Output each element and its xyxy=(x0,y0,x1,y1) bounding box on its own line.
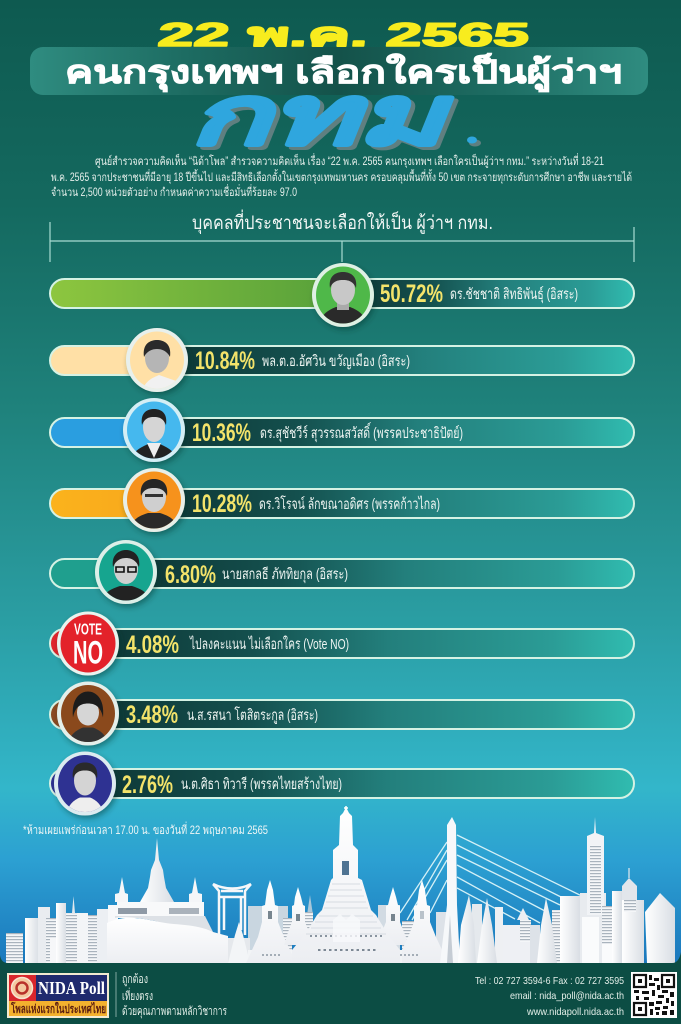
contact xyxy=(475,975,624,1018)
value: 10.84% xyxy=(195,347,255,375)
golden mount xyxy=(107,838,228,963)
row 1 xyxy=(50,263,634,327)
value: 10.36% xyxy=(192,419,251,447)
row 2 xyxy=(50,328,634,392)
row 7 xyxy=(50,682,634,746)
left towers xyxy=(6,896,118,963)
banner: headline xyxy=(30,47,648,95)
qr code xyxy=(631,972,677,1018)
title: date: 22 พ.ค. 2565 xyxy=(156,17,531,54)
portrait: Aswin xyxy=(126,328,188,392)
chart heading: บุคคลที่ประชาชนจะเลือกให้เป็น ผู้ว่าฯ กทม. xyxy=(192,209,493,235)
skyline xyxy=(0,806,681,963)
temple base xyxy=(248,950,445,963)
footer xyxy=(0,963,681,1024)
contact: email : nida_poll@nida.ac.th xyxy=(510,990,624,1002)
value: 4.08% xyxy=(126,631,179,659)
wat arun xyxy=(262,806,418,963)
value: 2.76% xyxy=(122,771,173,799)
portrait: Sakoltee xyxy=(95,540,157,604)
banner: headline: คนกรุงเทพฯ เลือกใครเป็นผู้ว่าฯ xyxy=(65,52,622,93)
title: BMA xyxy=(182,71,481,165)
logo: โพลแห่งแรกในประเทศไทย xyxy=(10,1001,106,1016)
bridge pylon xyxy=(440,817,460,963)
slogan: ด้วยคุณภาพตามหลักวิชาการ xyxy=(122,1004,227,1019)
intro text xyxy=(51,153,632,199)
value: 3.48% xyxy=(126,701,178,729)
portrait: Chadchart xyxy=(312,263,374,327)
title: BMA: กทม xyxy=(182,71,474,162)
footer corners xyxy=(0,952,681,963)
name: น.ต.ศิธา ทิวารี (พรรคไทยสร้างไทย) xyxy=(181,775,342,793)
background blocks xyxy=(228,895,448,963)
contact: Tel : 02 727 3594-6 Fax : 02 727 3595 xyxy=(475,975,624,987)
slogan: เที่ยงตรง xyxy=(122,987,153,1003)
slogan xyxy=(122,972,227,1019)
slogan: ถูกต้อง xyxy=(122,972,148,987)
portrait: Rosana xyxy=(57,682,119,746)
name: ดร.ชัชชาติ สิทธิพันธุ์ (อิสระ) xyxy=(450,286,578,304)
row 8 xyxy=(50,752,634,816)
row 4 xyxy=(50,468,634,532)
bracket xyxy=(50,222,634,262)
portrait: Sita xyxy=(54,752,116,816)
value: 10.28% xyxy=(192,490,252,518)
name: ดร.สุชัชวีร์ สุวรรณสวัสดิ์ (พรรคประชาธิปัตย์) xyxy=(260,422,463,443)
row 3 xyxy=(50,398,634,462)
name: ดร.วิโรจน์ ลักขณาอดิศร (พรรคก้าวไกล) xyxy=(259,495,440,513)
bridge cables xyxy=(400,835,590,923)
name: น.ส.รสนา โตสิตระกูล (อิสระ) xyxy=(187,706,318,724)
embargo note: *ห้ามเผยแพร่ก่อนเวลา 17.00 น. ของวันที่ 22 พฤษภาคม 2565 xyxy=(23,821,268,837)
portrait: Wiroj xyxy=(123,468,185,532)
right towers xyxy=(458,817,675,963)
icon: vote no: NO xyxy=(73,634,103,670)
contact: www.nidapoll.nida.ac.th xyxy=(526,1006,624,1018)
giant swing xyxy=(213,884,251,935)
icon: vote no xyxy=(57,612,119,676)
logo xyxy=(7,973,109,1018)
title: BMA: กทม xyxy=(186,74,478,165)
logo: NIDA Poll xyxy=(38,978,105,998)
intro text: จำนวน 2,500 หน่วยตัวอย่าง กำหนดค่าความเชื่อมั่นที่ร้อยละ 97.0 xyxy=(51,184,297,199)
name: ไปลงคะแนน ไม่เลือกใคร (Vote NO) xyxy=(189,635,349,653)
row 6 xyxy=(50,612,634,676)
icon: vote no: VOTE xyxy=(74,622,102,638)
value: 50.72% xyxy=(380,280,443,308)
name: นายสกลธี ภัททิยกุล (อิสระ) xyxy=(222,566,348,584)
portrait: Suchatvee xyxy=(123,398,185,462)
temple prangs xyxy=(246,880,442,963)
row 5 xyxy=(50,540,634,604)
name: พล.ต.อ.อัศวิน ขวัญเมือง (อิสระ) xyxy=(262,353,410,370)
value: 6.80% xyxy=(165,561,216,589)
